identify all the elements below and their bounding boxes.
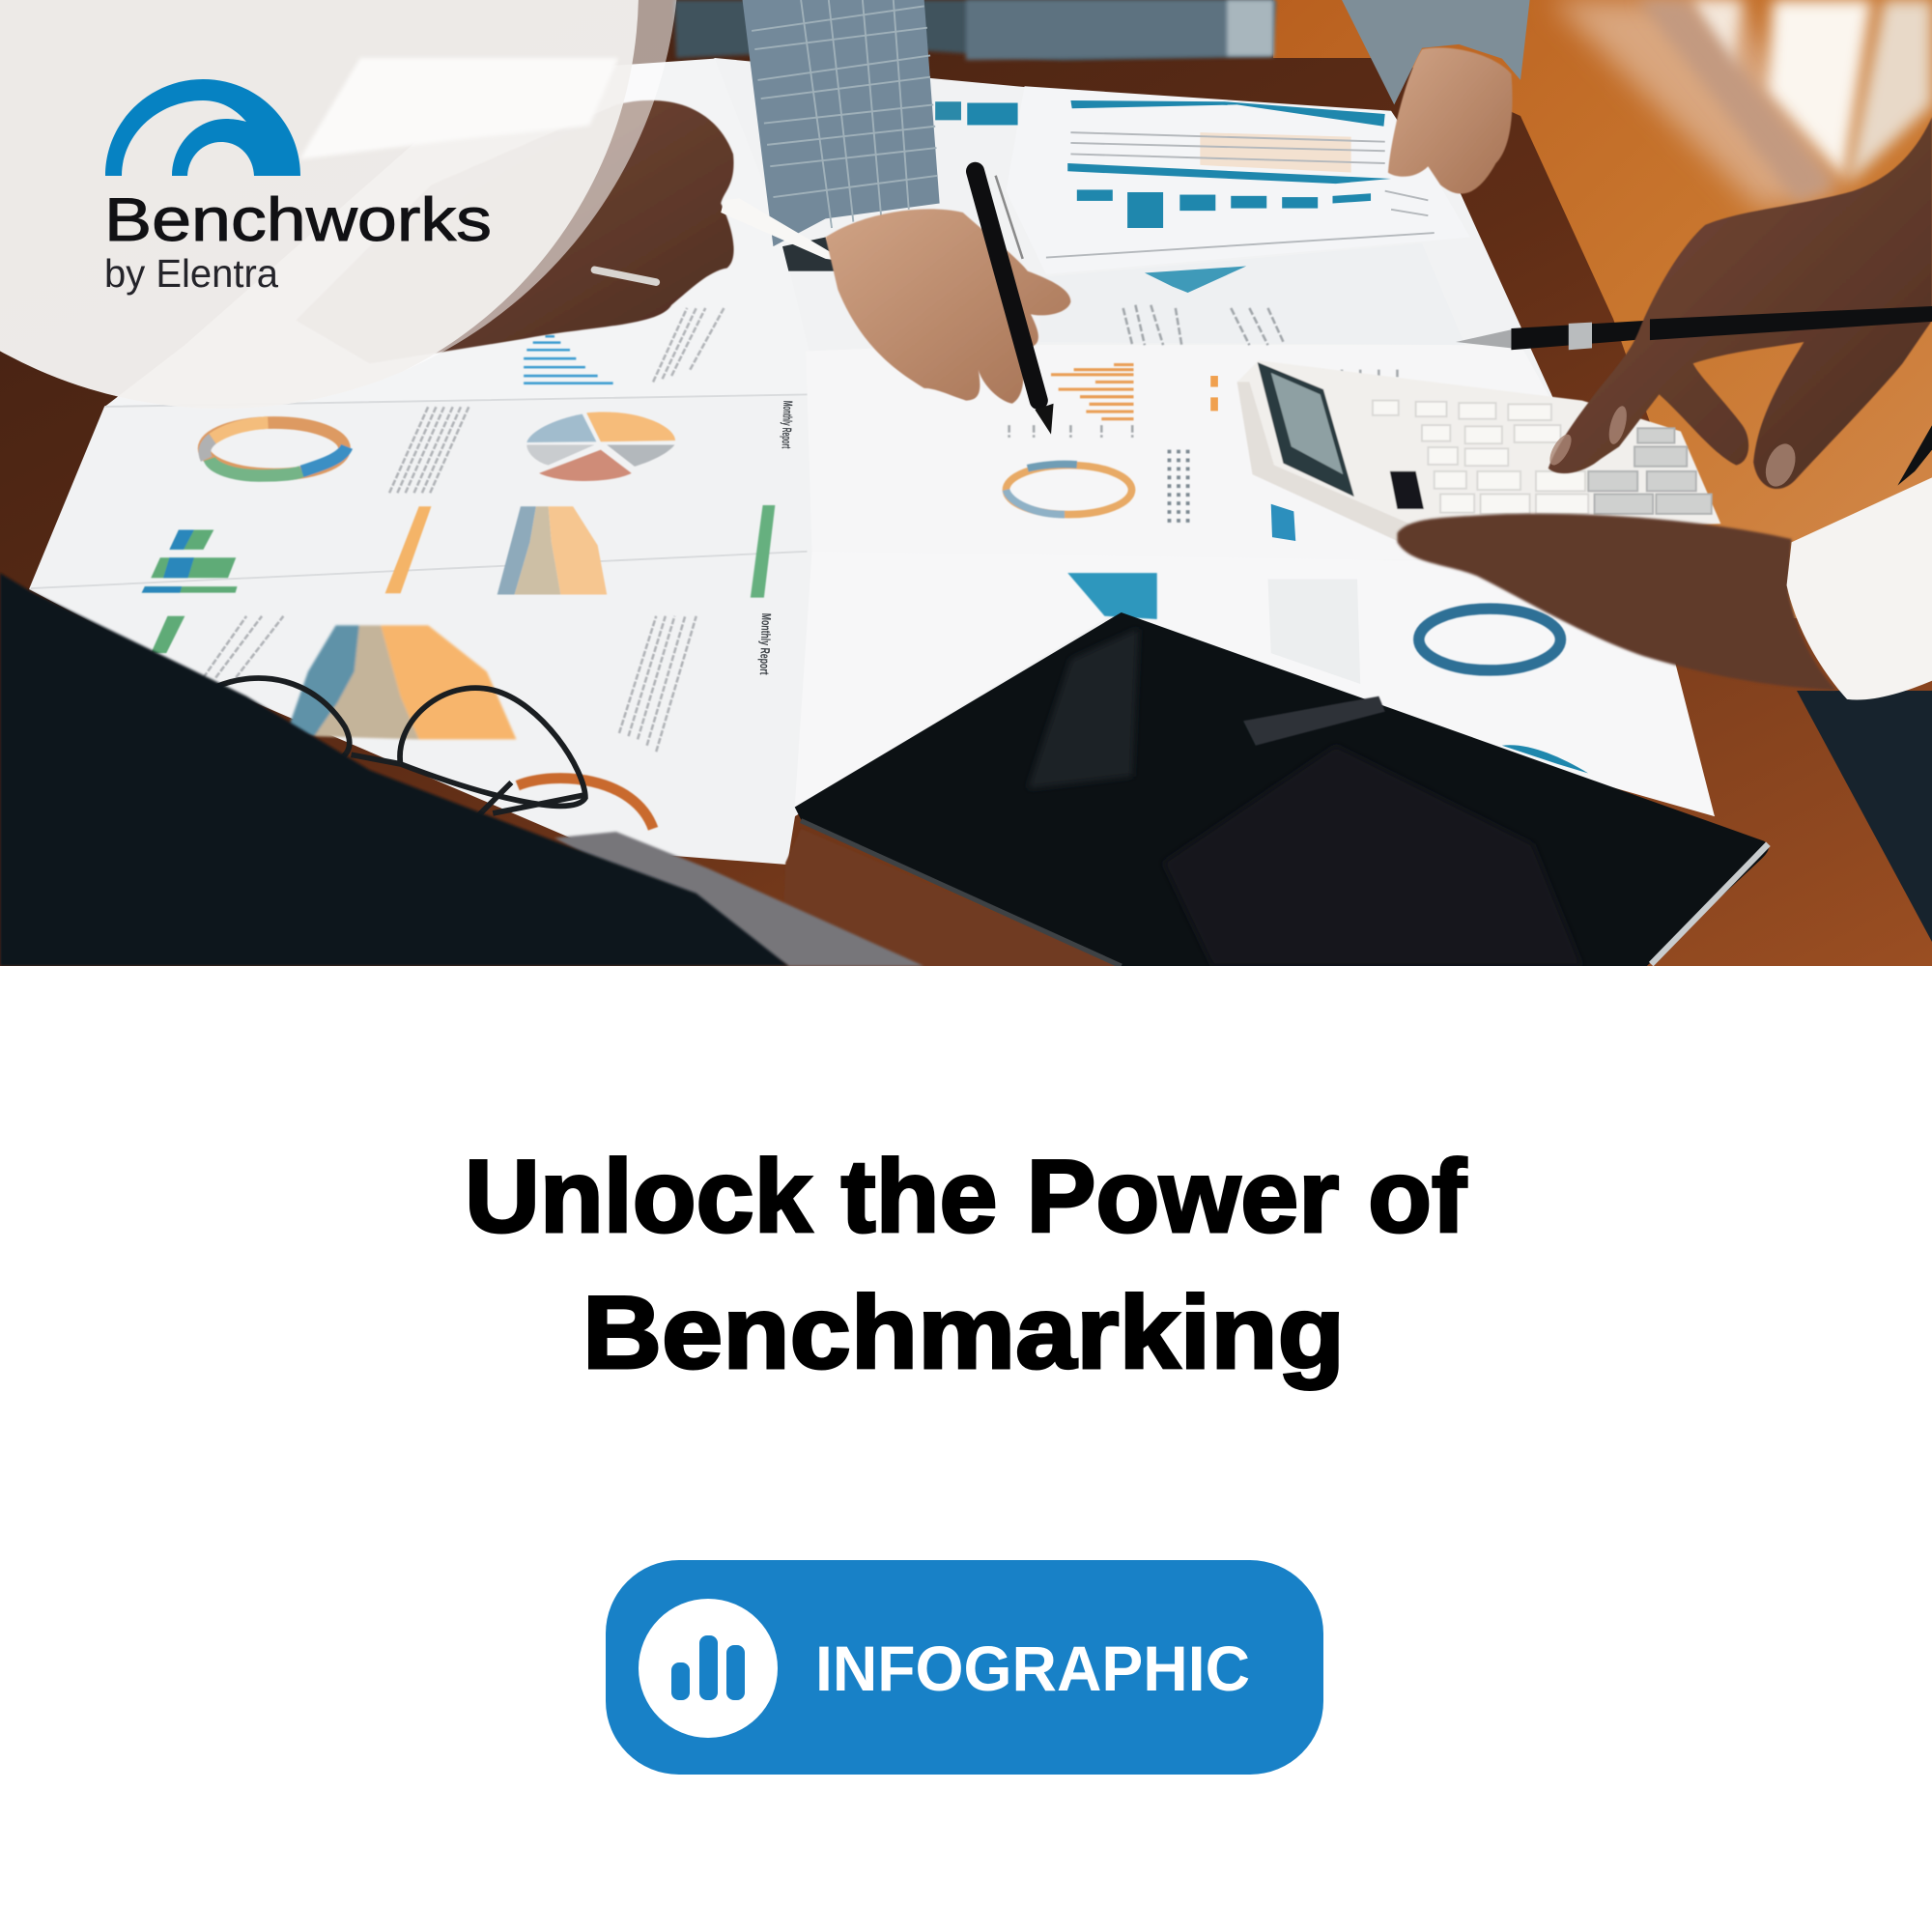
wood strip under tablet (781, 829, 1122, 966)
dark foreground laptop (0, 573, 788, 966)
dark hand on top with pen (1548, 117, 1932, 489)
fingernails (1546, 404, 1801, 491)
title (465, 1138, 1466, 1390)
pen barrel in front of the hand (1650, 306, 1932, 340)
orange floor (1273, 0, 1932, 618)
teal cube chart (1145, 267, 1246, 293)
area chart large (287, 625, 516, 739)
blue arc fragment (1502, 745, 1588, 773)
black square (1390, 471, 1424, 509)
grey text lines (203, 308, 724, 752)
title line 1: Unlock the Power of (465, 1138, 1466, 1254)
black tablet (795, 612, 1769, 966)
monthly report headings: Monthly Report (780, 400, 795, 449)
dark hand under calculator (1397, 514, 1836, 690)
large blue donut (1419, 609, 1560, 670)
upper sheet edge (106, 58, 714, 406)
window light streaks (1551, 0, 1932, 210)
tablet lower edge (801, 821, 1122, 966)
zoomed left half artwork (0, 0, 1122, 966)
table on lower sheet (1268, 580, 1360, 684)
blue bar edge at left (967, 103, 1018, 125)
silver pen tip and black pen barrel (1456, 321, 1650, 350)
ring (594, 270, 656, 282)
black marker pen (976, 171, 1054, 435)
badge pill (606, 1560, 1323, 1775)
orange bar chart (1051, 365, 1133, 419)
stacked bar chart (142, 530, 238, 593)
ring chart (1006, 465, 1132, 515)
logo icon: blue double arch (105, 79, 300, 176)
blue histogram (524, 336, 613, 384)
monthly report headings: Monthly Report (867, 461, 895, 530)
photo: team reviewing benchmark reports on a table (0, 0, 1932, 966)
grey sheet text lines (1009, 305, 1397, 438)
light hand holding top sheet (1388, 47, 1513, 194)
plaid jacket sleeve (743, 0, 940, 246)
top report sheet (1006, 86, 1470, 274)
calculator display (1258, 362, 1354, 497)
table wood surface (0, 0, 1932, 966)
orange donut with glasses (215, 678, 653, 829)
lower sheet edge line (31, 394, 819, 588)
zoomed right half artwork (795, 0, 1932, 966)
stack of white report papers (29, 58, 1715, 865)
lower sheet (873, 572, 1715, 817)
dark navy floor bottom right (1797, 691, 1932, 942)
area chart small (497, 506, 607, 594)
dark cuff shadow (782, 238, 838, 271)
badge label: INFOGRAPHIC (815, 1633, 1250, 1704)
black watch strap (1897, 425, 1932, 486)
logo wordmark: Benchworks (104, 186, 492, 254)
title line 2: Benchmarking (582, 1274, 1345, 1390)
dark hand holding a stylus (435, 99, 734, 354)
white shirt cuff (1787, 477, 1932, 700)
donut chart (204, 423, 347, 475)
table of values (874, 572, 912, 679)
calculator keys (1373, 401, 1588, 514)
pie chart (526, 412, 675, 481)
monthly report headings: Monthly Report (757, 613, 774, 675)
white stylus (721, 205, 832, 260)
teal bars on far sheet (935, 101, 961, 120)
icon: bar chart in white circle (639, 1599, 778, 1738)
green vertical bar (751, 505, 775, 598)
middle sheet (808, 393, 893, 529)
infographic badge (606, 1560, 1323, 1775)
grey sleeve over wrist (1342, 0, 1530, 104)
blue tag (1271, 504, 1295, 541)
green bar lower left (151, 616, 185, 653)
legend ticks (1169, 450, 1188, 524)
logo tagline: by Elentra (104, 251, 278, 296)
grey laptop corner (554, 832, 924, 966)
orange vertical bar (385, 506, 431, 593)
teal triangle chart (1067, 573, 1157, 619)
centre hand (826, 209, 1070, 404)
small legend marks (1210, 376, 1218, 411)
monthly report headings (757, 400, 895, 675)
white calculator (1237, 360, 1720, 541)
logo backdrop: translucent white circle (0, 0, 679, 416)
suit jacket at top (674, 0, 1275, 60)
logo: Benchworks by Elentra (104, 79, 492, 296)
